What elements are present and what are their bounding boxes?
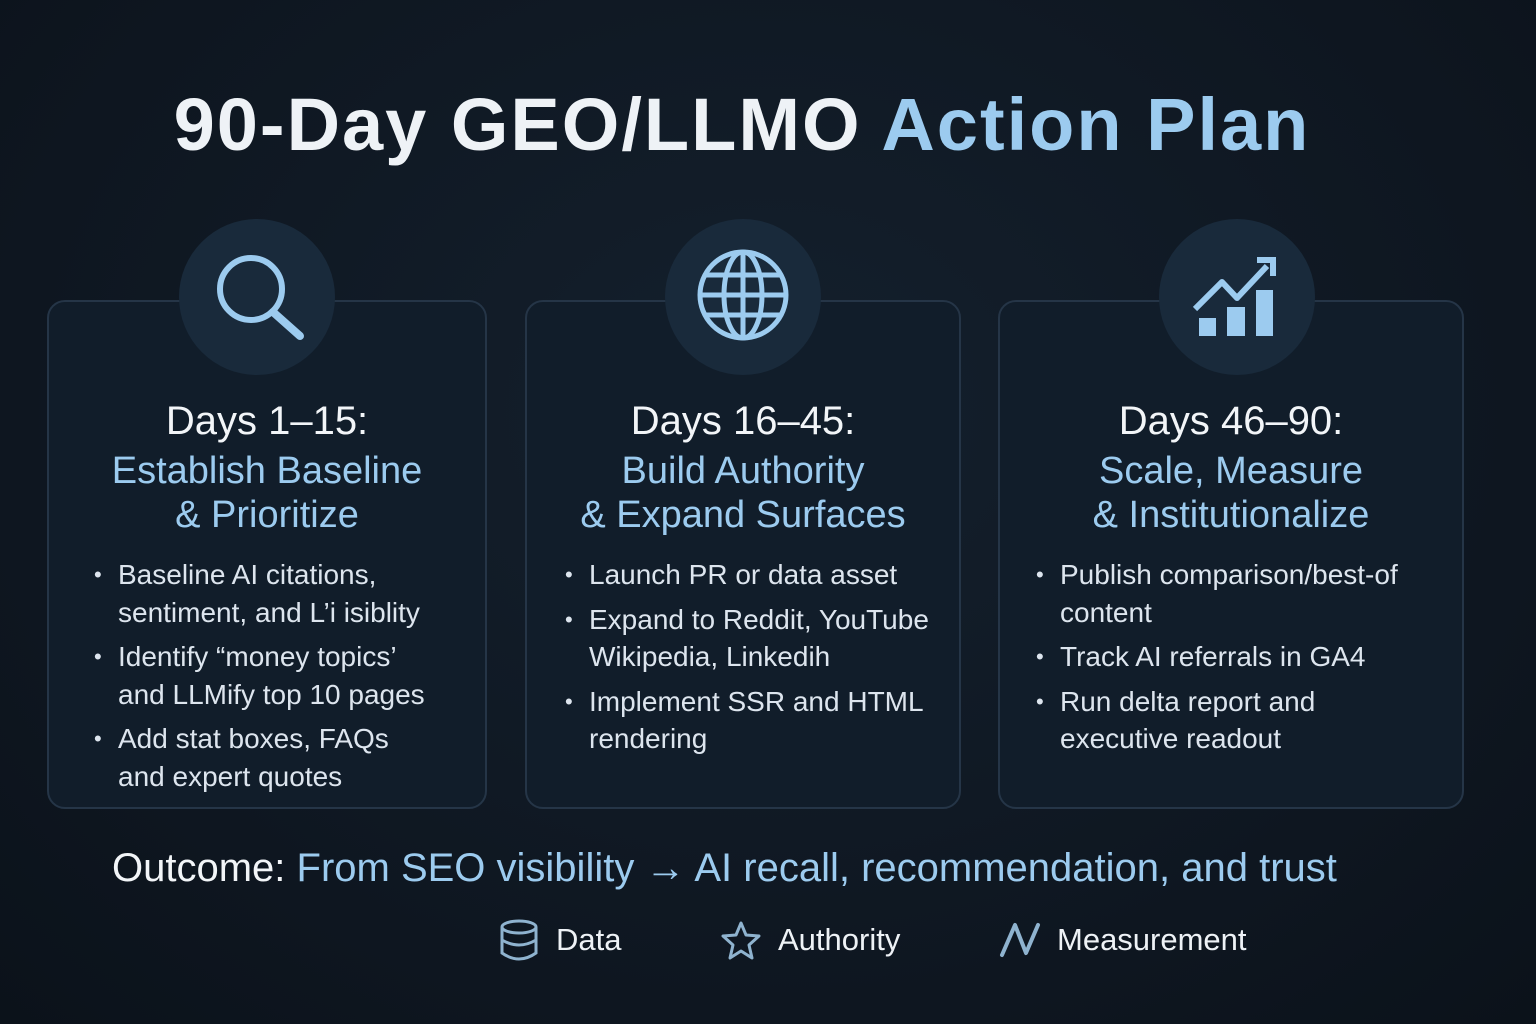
heading: days 16-45 xyxy=(580,399,906,536)
bullets: days 46-90: Run delta report and executive readout xyxy=(1060,686,1315,754)
icon: magnifier xyxy=(179,219,335,375)
outcome text: Outcome: From SEO visibility → AI recall, recommendation, and trust xyxy=(112,846,1337,890)
bullets: days 1-15: Baseline AI citations, sentiment, and L’i isiblity xyxy=(118,559,420,628)
bullets: days 1-15: Identify “money topics’ and LLMify top 10 pages xyxy=(118,641,425,710)
bullets: days 1-15 xyxy=(94,559,425,792)
panel: days 46-90 xyxy=(998,300,1464,809)
heading: days 1-15: & Prioritize xyxy=(175,494,359,536)
heading: days 16-45: & Expand Surfaces xyxy=(580,494,906,536)
panel: days 1-15 xyxy=(47,300,487,809)
legend: authority: Authority xyxy=(778,922,900,957)
heading: days 1-15 xyxy=(112,399,422,536)
heading: days 16-45: Days 16–45: xyxy=(631,399,855,443)
heading: days 46-90: & Institutionalize xyxy=(1093,494,1369,536)
bullets: days 16-45: Launch PR or data asset xyxy=(589,559,897,590)
legend: data xyxy=(500,920,622,960)
legend: authority xyxy=(721,922,900,960)
heading: days 46-90 xyxy=(1093,399,1369,536)
bullets: days 16-45: Expand to Reddit, YouTube Wikipedia, Linkedih xyxy=(589,604,929,672)
icon: globe xyxy=(665,219,821,375)
bullets: days 16-45: Implement SSR and HTML rendering xyxy=(589,686,923,754)
bullets: days 46-90: Track AI referrals in GA4 xyxy=(1060,641,1366,672)
bullets: days 16-45 xyxy=(566,559,929,754)
legend: measurement: Measurement xyxy=(1057,922,1247,957)
bullets: days 46-90: Publish comparison/best-of content xyxy=(1060,559,1398,628)
bullets: days 1-15: Add stat boxes, FAQs and expert quotes xyxy=(118,723,389,792)
heading: days 16-45: Build Authority xyxy=(622,450,864,492)
heading: days 1-15: Days 1–15: xyxy=(166,399,368,443)
title: 90-Day GEO/LLMO Action Plan xyxy=(174,83,1310,166)
heading: days 46-90: Scale, Measure xyxy=(1099,450,1363,492)
heading: days 46-90: Days 46–90: xyxy=(1119,399,1343,443)
panel: days 16-45 xyxy=(525,300,961,809)
legend: data: Data xyxy=(556,922,621,957)
legend xyxy=(500,920,1247,960)
bullets: days 46-90 xyxy=(1036,559,1398,754)
heading: days 1-15: Establish Baseline xyxy=(112,450,422,492)
icon: chart xyxy=(1159,219,1315,375)
